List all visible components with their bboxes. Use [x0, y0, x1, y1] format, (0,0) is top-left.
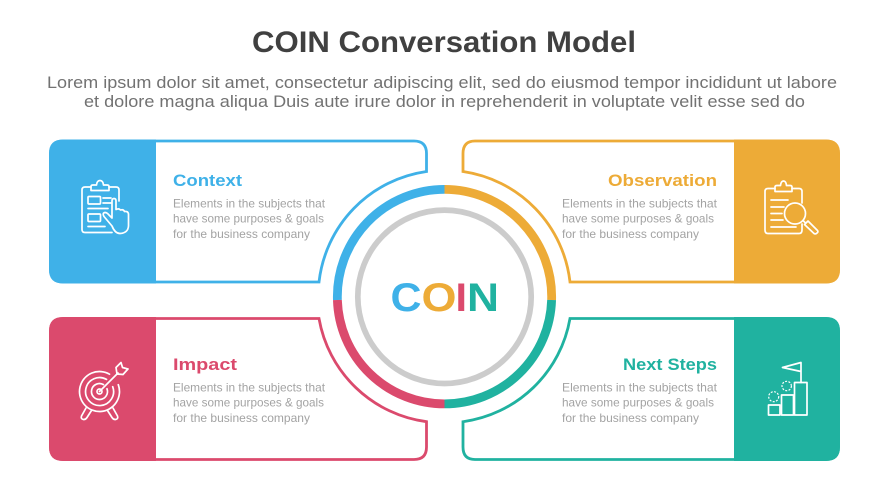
grey inner ring	[358, 210, 531, 384]
impact colour block	[49, 317, 156, 461]
context body text: for the business company	[173, 227, 310, 241]
icon: clipboard with hand	[82, 180, 128, 234]
observation body text: have some purposes & goals	[562, 212, 714, 226]
icon: target with arrow	[79, 362, 128, 420]
COIN centre label: N	[467, 276, 499, 320]
next steps body text	[562, 380, 718, 425]
COIN centre label: O	[422, 276, 456, 320]
observation body text: for the business company	[562, 227, 699, 241]
COIN centre label: C	[390, 276, 422, 320]
coloured ring	[337, 189, 552, 404]
panel: observation	[463, 140, 840, 284]
icon: clipboard with magnifier	[765, 181, 818, 234]
next steps colour block	[734, 317, 840, 461]
panel: next steps	[463, 317, 840, 461]
title: COIN Conversation Model	[252, 26, 636, 59]
observation heading: Observation	[608, 172, 717, 190]
COIN centre label: I	[456, 276, 467, 320]
impact body text: Elements in the subjects that	[173, 380, 326, 394]
subtitle text: Lorem ipsum dolor sit amet, consectetur adipiscing elit, sed do eiusmod tempor incididunt ut labore	[47, 74, 837, 92]
subtitle text: et dolore magna aliqua Duis aute irure dolor in reprehenderit in voluptate velit esse sed do	[84, 93, 805, 111]
observation outline	[463, 141, 838, 282]
observation body text: Elements in the subjects that	[562, 196, 718, 210]
panel: impact	[49, 317, 426, 461]
impact body text	[173, 380, 326, 425]
context body text	[173, 196, 326, 241]
observation colour block	[734, 140, 840, 284]
subtitle text	[47, 74, 837, 111]
impact outline	[50, 318, 426, 460]
context body text: Elements in the subjects that	[173, 196, 326, 210]
observation body text	[562, 196, 718, 241]
impact body text: for the business company	[173, 411, 310, 425]
impact heading: Impact	[173, 356, 238, 374]
panel: context	[49, 140, 426, 284]
impact body text: have some purposes & goals	[173, 396, 324, 410]
context outline	[50, 141, 426, 282]
context body text: have some purposes & goals	[173, 212, 324, 226]
central circle	[337, 189, 552, 404]
next steps body text: for the business company	[562, 411, 699, 425]
icon: steps with flag	[768, 362, 807, 415]
next steps heading: Next Steps	[623, 356, 717, 374]
next steps body text: Elements in the subjects that	[562, 380, 718, 394]
context colour block	[49, 140, 156, 284]
next steps body text: have some purposes & goals	[562, 396, 714, 410]
context heading: Context	[173, 172, 243, 190]
next steps outline	[463, 318, 838, 460]
COIN centre label	[390, 276, 499, 320]
